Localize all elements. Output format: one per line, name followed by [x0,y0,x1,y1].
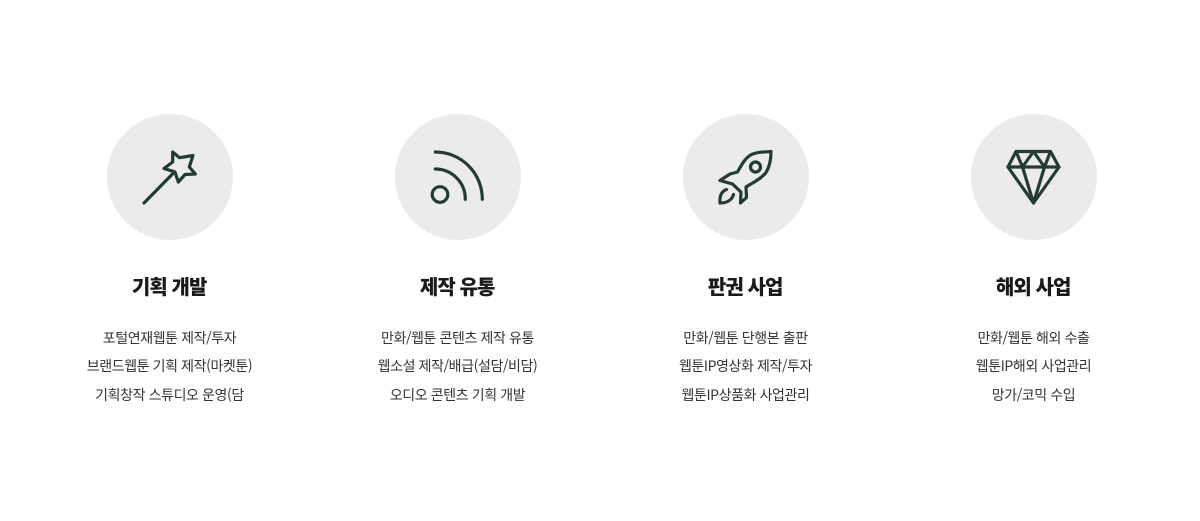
icon: magic wand [107,114,233,240]
panel: 제작 유통 [378,114,537,405]
list item: 웹소설 제작/배급(설담/비담) [378,356,537,376]
icon: rss signal [395,114,521,240]
list item: 웹툰IP상품화 사업관리 [681,385,810,405]
panel: 판권 사업 [679,114,812,405]
panel: 기획 개발 [87,114,252,405]
list item: 기획창작 스튜디오 운영(담 [95,385,244,405]
heading: 기획 개발 [132,271,207,300]
list item: 브랜드웹툰 기획 제작(마켓툰) [87,356,252,376]
panel: 해외 사업 [971,114,1097,405]
list item: 포털연재웹툰 제작/투자 [103,328,236,348]
list item: 만화/웹툰 해외 수출 [978,328,1089,348]
list item: 웹툰IP해외 사업관리 [976,356,1091,376]
list item: 만화/웹툰 콘텐츠 제작 유통 [381,328,534,348]
list item: 만화/웹툰 단행본 출판 [683,328,808,348]
icon: diamond [971,114,1097,240]
heading: 해외 사업 [996,271,1071,300]
list item: 웹툰IP영상화 제작/투자 [679,356,812,376]
list item: 망가/코믹 수입 [992,385,1075,405]
heading: 제작 유통 [420,271,495,300]
heading: 판권 사업 [708,271,783,300]
list item: 오디오 콘텐츠 기획 개발 [390,385,525,405]
icon: rocket [683,114,809,240]
